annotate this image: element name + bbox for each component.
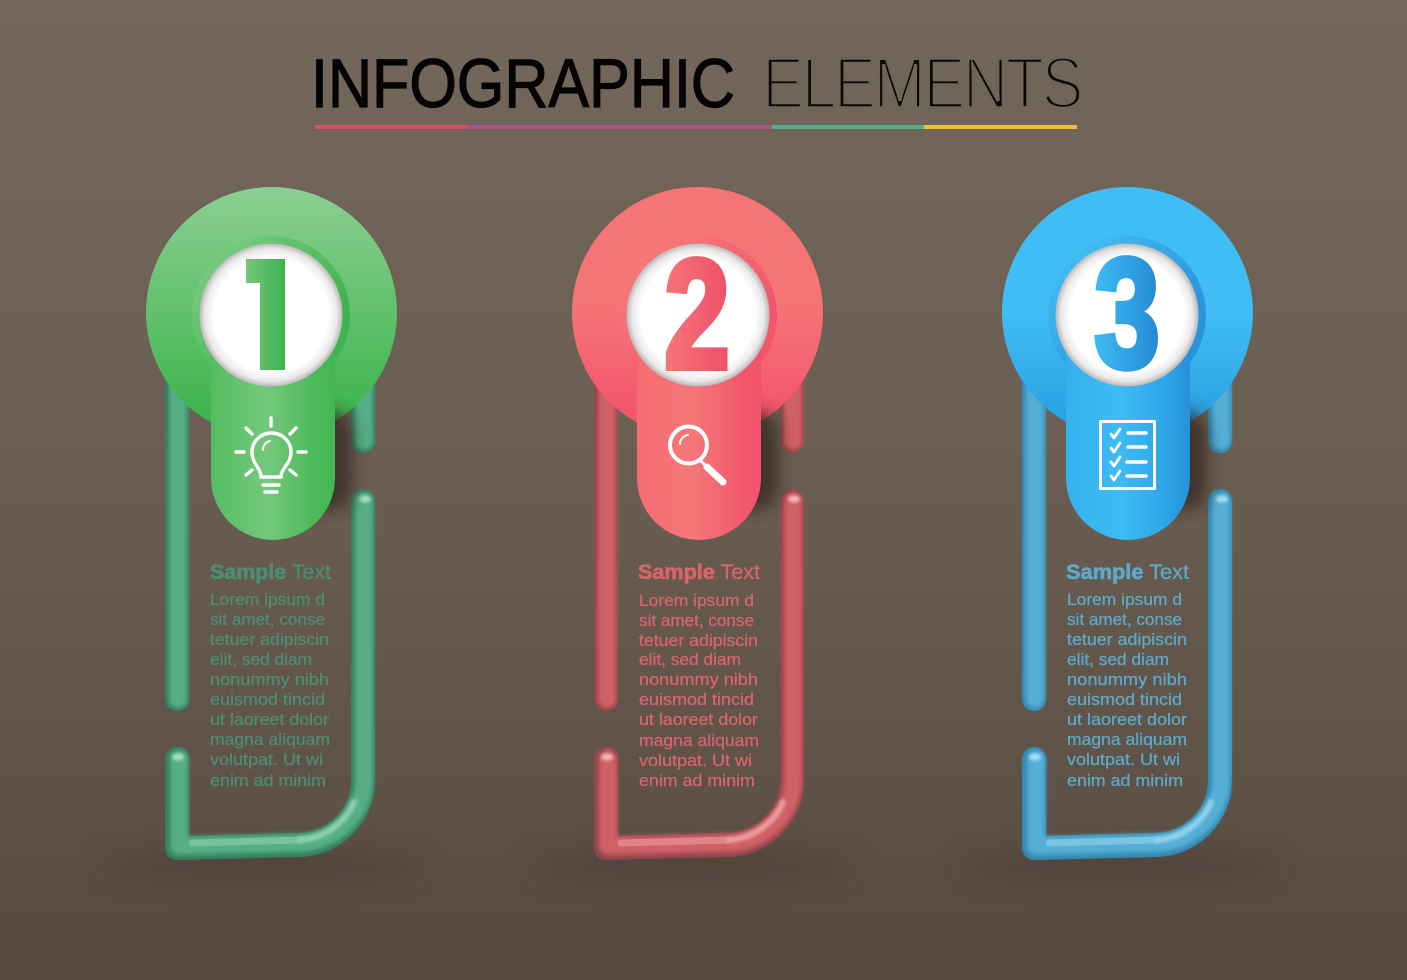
number well <box>200 244 342 386</box>
caption body: euismod tincid <box>639 690 754 709</box>
caption body: magna aliquam <box>210 730 330 749</box>
number well <box>1056 244 1198 386</box>
caption body <box>210 590 330 790</box>
caption body: volutpat. Ut wi <box>639 751 752 770</box>
caption body: sit amet, conse <box>1067 610 1182 629</box>
tube frame <box>172 380 371 848</box>
caption <box>1066 561 1189 790</box>
title bold word: INFOGRAPHIC <box>311 45 735 122</box>
title light word: ELEMENTS <box>762 44 1081 124</box>
caption body: nonummy nibh <box>210 670 329 689</box>
caption body: euismod tincid <box>210 690 325 709</box>
caption <box>210 561 331 790</box>
number ring <box>619 236 777 394</box>
number 2: 2 <box>664 228 730 402</box>
tube frame <box>1029 380 1228 848</box>
floor shadow <box>532 852 852 880</box>
caption body: sit amet, conse <box>639 611 754 630</box>
header disc <box>572 187 823 438</box>
title colour rule <box>315 125 1077 129</box>
caption body: elit, sed diam <box>639 650 741 669</box>
number 1 <box>246 259 285 370</box>
caption <box>638 561 760 790</box>
title <box>311 44 1081 124</box>
floor shadow <box>960 852 1280 880</box>
pill tab <box>1066 340 1190 540</box>
caption body <box>639 591 759 790</box>
caption body: enim ad minim <box>639 771 755 790</box>
caption heading: Sample Text <box>638 561 760 584</box>
icon: light bulb <box>236 418 306 492</box>
tube frame <box>601 380 800 848</box>
caption body: ut laoreet dolor <box>1067 710 1187 729</box>
number well <box>626 244 770 386</box>
panel: step 2 red <box>532 187 852 880</box>
caption body: enim ad minim <box>210 771 326 790</box>
caption body: nonummy nibh <box>639 670 758 689</box>
caption body: sit amet, conse <box>210 610 325 629</box>
caption body: elit, sed diam <box>1067 650 1169 669</box>
pill shadow <box>302 410 352 510</box>
caption body: Lorem ipsum d <box>210 590 325 609</box>
caption body: ut laoreet dolor <box>639 710 758 729</box>
header disc <box>1002 187 1253 438</box>
caption body: volutpat. Ut wi <box>1067 750 1180 769</box>
icon: magnifier <box>670 426 723 482</box>
header disc <box>146 187 397 438</box>
pill tab <box>211 340 335 540</box>
pill tab <box>637 340 761 540</box>
caption body: ut laoreet dolor <box>210 710 329 729</box>
floor shadow <box>102 852 422 880</box>
caption body: Lorem ipsum d <box>639 591 754 610</box>
icon: checklist <box>1100 422 1154 488</box>
caption body: magna aliquam <box>639 731 759 750</box>
number 1: 1 <box>235 225 305 404</box>
caption body: tetuer adipiscin <box>1067 630 1187 649</box>
caption body: volutpat. Ut wi <box>210 750 323 769</box>
pill shadow <box>728 410 778 510</box>
caption body: magna aliquam <box>1067 730 1187 749</box>
caption body: enim ad minim <box>1067 771 1183 790</box>
number ring <box>1048 236 1206 394</box>
panel: step 1 green <box>146 187 397 874</box>
caption body: nonummy nibh <box>1067 670 1187 689</box>
number 3: 3 <box>1094 227 1160 401</box>
caption body: tetuer adipiscin <box>639 631 758 650</box>
caption body: Lorem ipsum d <box>1067 590 1182 609</box>
panel: step 3 blue <box>960 187 1280 880</box>
caption heading: Sample Text <box>210 561 331 584</box>
caption body: tetuer adipiscin <box>210 630 329 649</box>
caption heading: Sample Text <box>1066 561 1189 584</box>
caption body: euismod tincid <box>1067 690 1182 709</box>
number ring <box>192 236 350 394</box>
caption body: elit, sed diam <box>210 650 312 669</box>
caption body <box>1067 590 1187 790</box>
pill shadow <box>1157 410 1207 510</box>
